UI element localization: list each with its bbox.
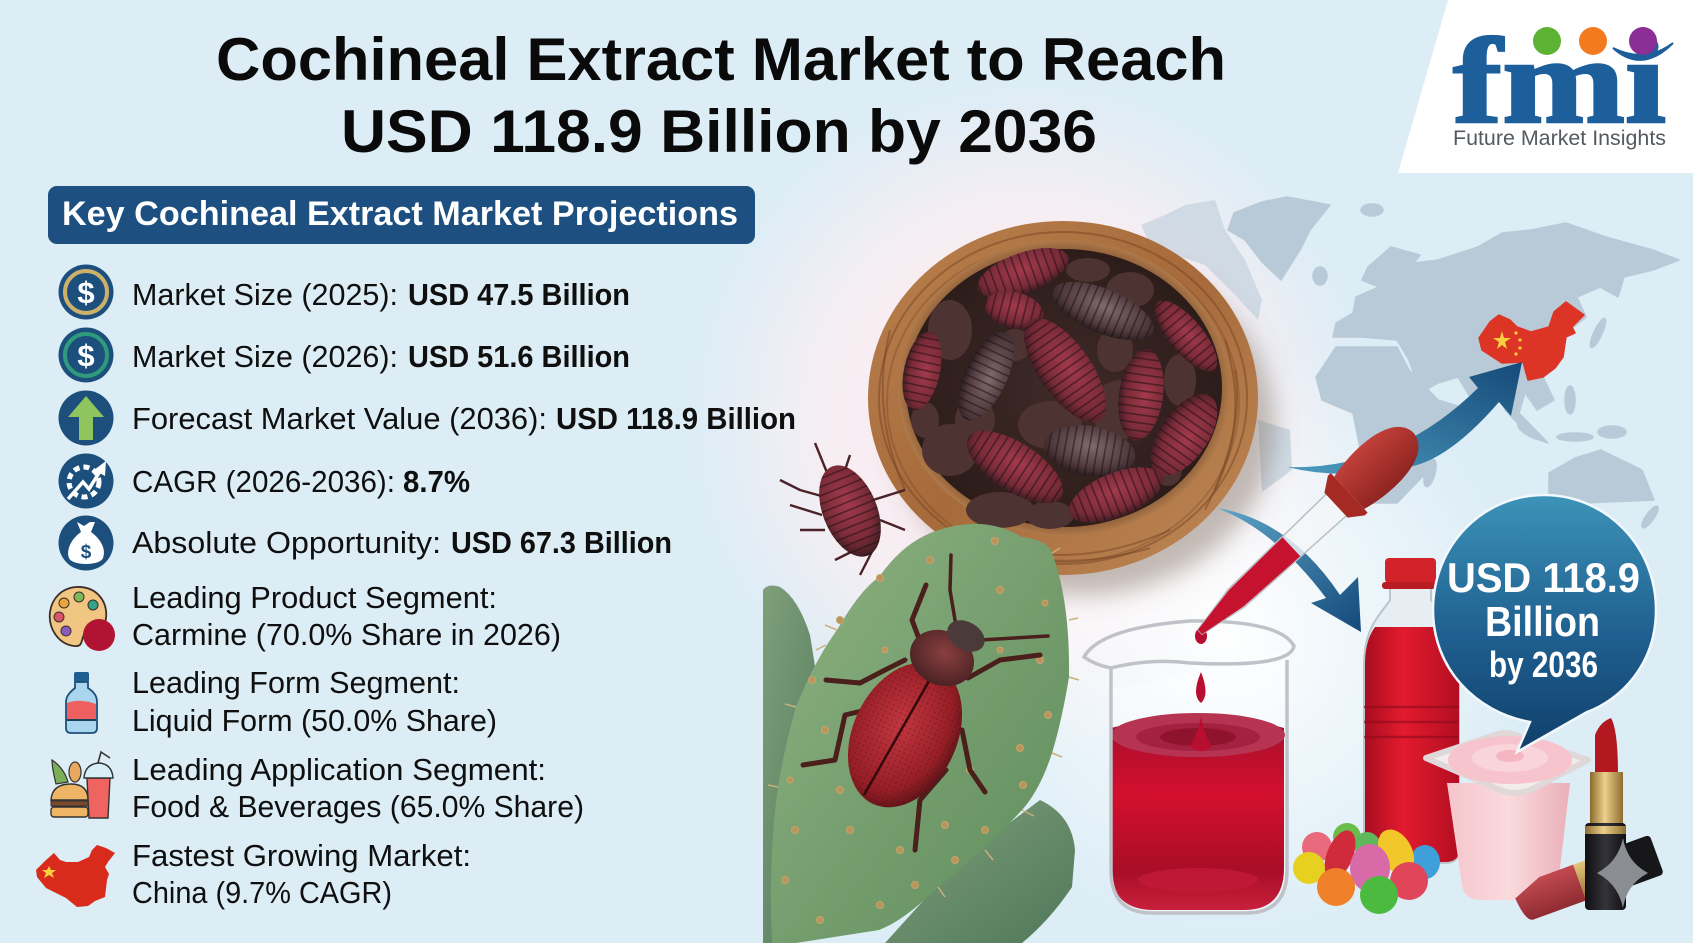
- item: leading product segment: Carmine (70.0% Share in 2026): [132, 617, 561, 652]
- item: forecast value: Forecast Market Value (2036):: [132, 401, 547, 436]
- item: CAGR: CAGR (2026-2036):: [132, 464, 395, 499]
- logo: coloured dots and arc: [1533, 27, 1673, 60]
- section heading pill: [48, 186, 755, 244]
- item: leading form segment: Leading Form Segment:: [132, 665, 460, 700]
- areoles: [782, 538, 1052, 924]
- item: market size 2025: [58, 264, 630, 320]
- item: absolute opportunity: [58, 516, 672, 570]
- spines: [768, 548, 1079, 897]
- red beetle: [803, 555, 1048, 850]
- callout bubble: USD 118.9: [1447, 554, 1640, 601]
- item: leading form segment: [66, 665, 497, 738]
- item: forecast value: [58, 390, 796, 446]
- icon: China map: [36, 845, 115, 907]
- section heading pill: Key Cochineal Extract Market Projections: [62, 195, 738, 233]
- list: key projections: [36, 264, 796, 910]
- map: australia: [1549, 450, 1654, 503]
- main pad: [771, 524, 1069, 943]
- item: market size 2025: USD 47.5 Billion: [408, 277, 630, 312]
- item: leading application segment: Leading Application Segment:: [132, 752, 546, 787]
- icon: gear with growth arrow: [58, 454, 114, 508]
- map: africa: [1316, 347, 1461, 503]
- icon: up arrow: [58, 390, 114, 446]
- title: [216, 26, 1226, 165]
- icon: liquid bottle: [66, 672, 97, 733]
- map: north america: [1141, 200, 1262, 320]
- logo panel: [1398, 0, 1693, 173]
- lower right pad: [885, 800, 1075, 943]
- beetle head: [942, 614, 990, 658]
- decorative sparkle: [1597, 838, 1648, 908]
- red bottle: [1364, 558, 1459, 863]
- arrow: to products: [1217, 508, 1361, 632]
- item: CAGR: [58, 454, 470, 508]
- beaker glass outline: [1084, 621, 1294, 913]
- upright lipstick: [1585, 718, 1626, 910]
- map: greenland: [1228, 197, 1330, 280]
- item: leading form segment: Liquid Form (50.0% Share): [132, 703, 497, 738]
- item: market size 2025: Market Size (2025):: [132, 277, 398, 312]
- arrow: to China: [1287, 362, 1522, 474]
- wood grain: [879, 232, 1247, 564]
- item: absolute opportunity: USD 67.3 Billion: [451, 525, 672, 560]
- beaker with red liquid: [1084, 621, 1294, 913]
- left pad: [763, 586, 830, 943]
- title: Cochineal Extract Market to Reach: [216, 26, 1226, 93]
- item: CAGR: 8.7%: [403, 464, 470, 499]
- icon: gold dollar: $: [77, 275, 95, 310]
- map: south america: [1258, 420, 1292, 492]
- item: market size 2026: USD 51.6 Billion: [408, 339, 630, 374]
- candies: [1293, 823, 1440, 914]
- logo: fmi letters: fmi: [1453, 14, 1666, 149]
- icon: gold dollar: [58, 264, 114, 320]
- title: USD 118.9 Billion by 2036: [341, 98, 1097, 165]
- item: market size 2026: Market Size (2026):: [132, 339, 398, 374]
- icon: burger and drink: [51, 752, 113, 818]
- icon: money bag: [58, 516, 114, 570]
- callout bubble: Billion: [1485, 598, 1600, 645]
- icon: green dollar: [58, 328, 114, 382]
- item: absolute opportunity: Absolute Opportunity:: [132, 525, 441, 560]
- map highlight: China: [1479, 302, 1584, 380]
- item: fastest growing market: Fastest Growing Market:: [132, 838, 471, 873]
- wooden bowl: [868, 221, 1258, 575]
- lying lipstick: [1510, 835, 1664, 925]
- beetle pronotum: [901, 620, 983, 696]
- world map: [1141, 197, 1679, 530]
- item: leading application segment: [51, 752, 584, 824]
- item: fastest growing market: [36, 838, 471, 910]
- logo: wordmark: Future Market Insights: [1453, 127, 1666, 150]
- bowl of dried cochineal: [868, 221, 1275, 595]
- item: forecast value: USD 118.9 Billion: [556, 401, 796, 436]
- item: leading product segment: [50, 580, 561, 652]
- item: leading application segment: Food & Beverages (65.0% Share): [132, 789, 584, 824]
- icon: green dollar: $: [77, 338, 95, 373]
- small cochineal insect: [780, 443, 905, 575]
- item: market size 2026: [58, 328, 630, 382]
- beetle elytra: [826, 644, 984, 826]
- item: leading product segment: Leading Product Segment:: [132, 580, 497, 615]
- map: eurasia: [1333, 223, 1679, 443]
- icon: money bag: $: [81, 542, 92, 563]
- beetle legs and antennae: [803, 555, 1048, 850]
- icon: paint palette and carmine: [50, 587, 115, 651]
- yogurt cup: [1426, 733, 1588, 900]
- droplets: [1190, 628, 1212, 751]
- background lumps: [911, 258, 1196, 529]
- map: islands: [1313, 204, 1661, 530]
- dropper: [1182, 413, 1432, 652]
- callout bubble: [1433, 495, 1656, 752]
- callout bubble: by 2036: [1489, 644, 1598, 685]
- item: fastest growing market: China (9.7% CAGR): [132, 875, 392, 910]
- cactus pads: [763, 524, 1079, 943]
- bugs: [896, 238, 1231, 534]
